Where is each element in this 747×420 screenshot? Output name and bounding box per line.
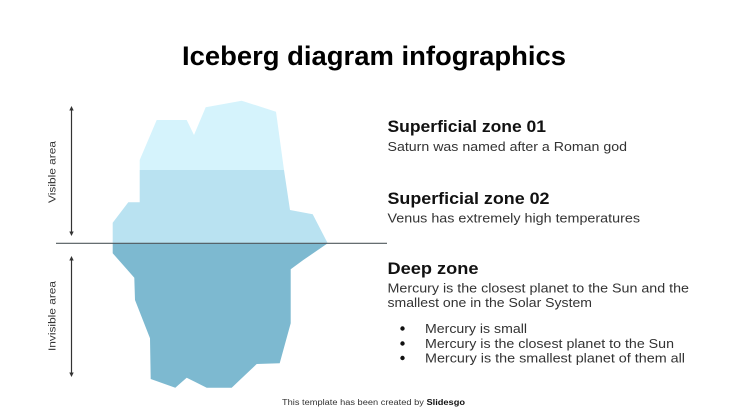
waterline — [56, 242, 387, 244]
label: invisible area: Invisible area — [46, 281, 58, 351]
description: deep zone — [388, 280, 689, 310]
iceberg middle layer — [113, 170, 328, 243]
heading: superficial zone 01: Superficial zone 01 — [388, 117, 546, 136]
iceberg top layer — [140, 101, 284, 170]
bullet list: Mercury is the closest planet to the Sun — [425, 336, 674, 351]
description: superficial zone 01: Saturn was named after a Roman god — [388, 139, 627, 154]
text block: deep zone — [388, 259, 689, 366]
text block: superficial zone 02 — [388, 189, 641, 226]
heading: deep zone: Deep zone — [388, 259, 478, 278]
description: deep zone: smallest one in the Solar System — [388, 295, 592, 310]
arrow: visible area — [69, 106, 74, 236]
footer credit: This template has been created by Slidesgo — [282, 398, 465, 407]
arrow: invisible area — [69, 256, 74, 377]
description: deep zone: Mercury is the closest planet to the Sun and the — [388, 280, 689, 296]
label: visible area: Visible area — [46, 141, 58, 203]
bullet list: Mercury is the smallest planet of them all — [425, 350, 685, 366]
title: Iceberg diagram infographics — [182, 41, 566, 71]
bullet list — [400, 321, 685, 366]
description: superficial zone 02: Venus has extremely high temperatures — [388, 210, 641, 226]
iceberg diagram — [113, 101, 328, 388]
bullet list: Mercury is small — [425, 321, 527, 336]
iceberg submerged layer — [113, 243, 328, 388]
heading: superficial zone 02: Superficial zone 02 — [388, 189, 550, 208]
text block: superficial zone 01 — [388, 117, 627, 154]
